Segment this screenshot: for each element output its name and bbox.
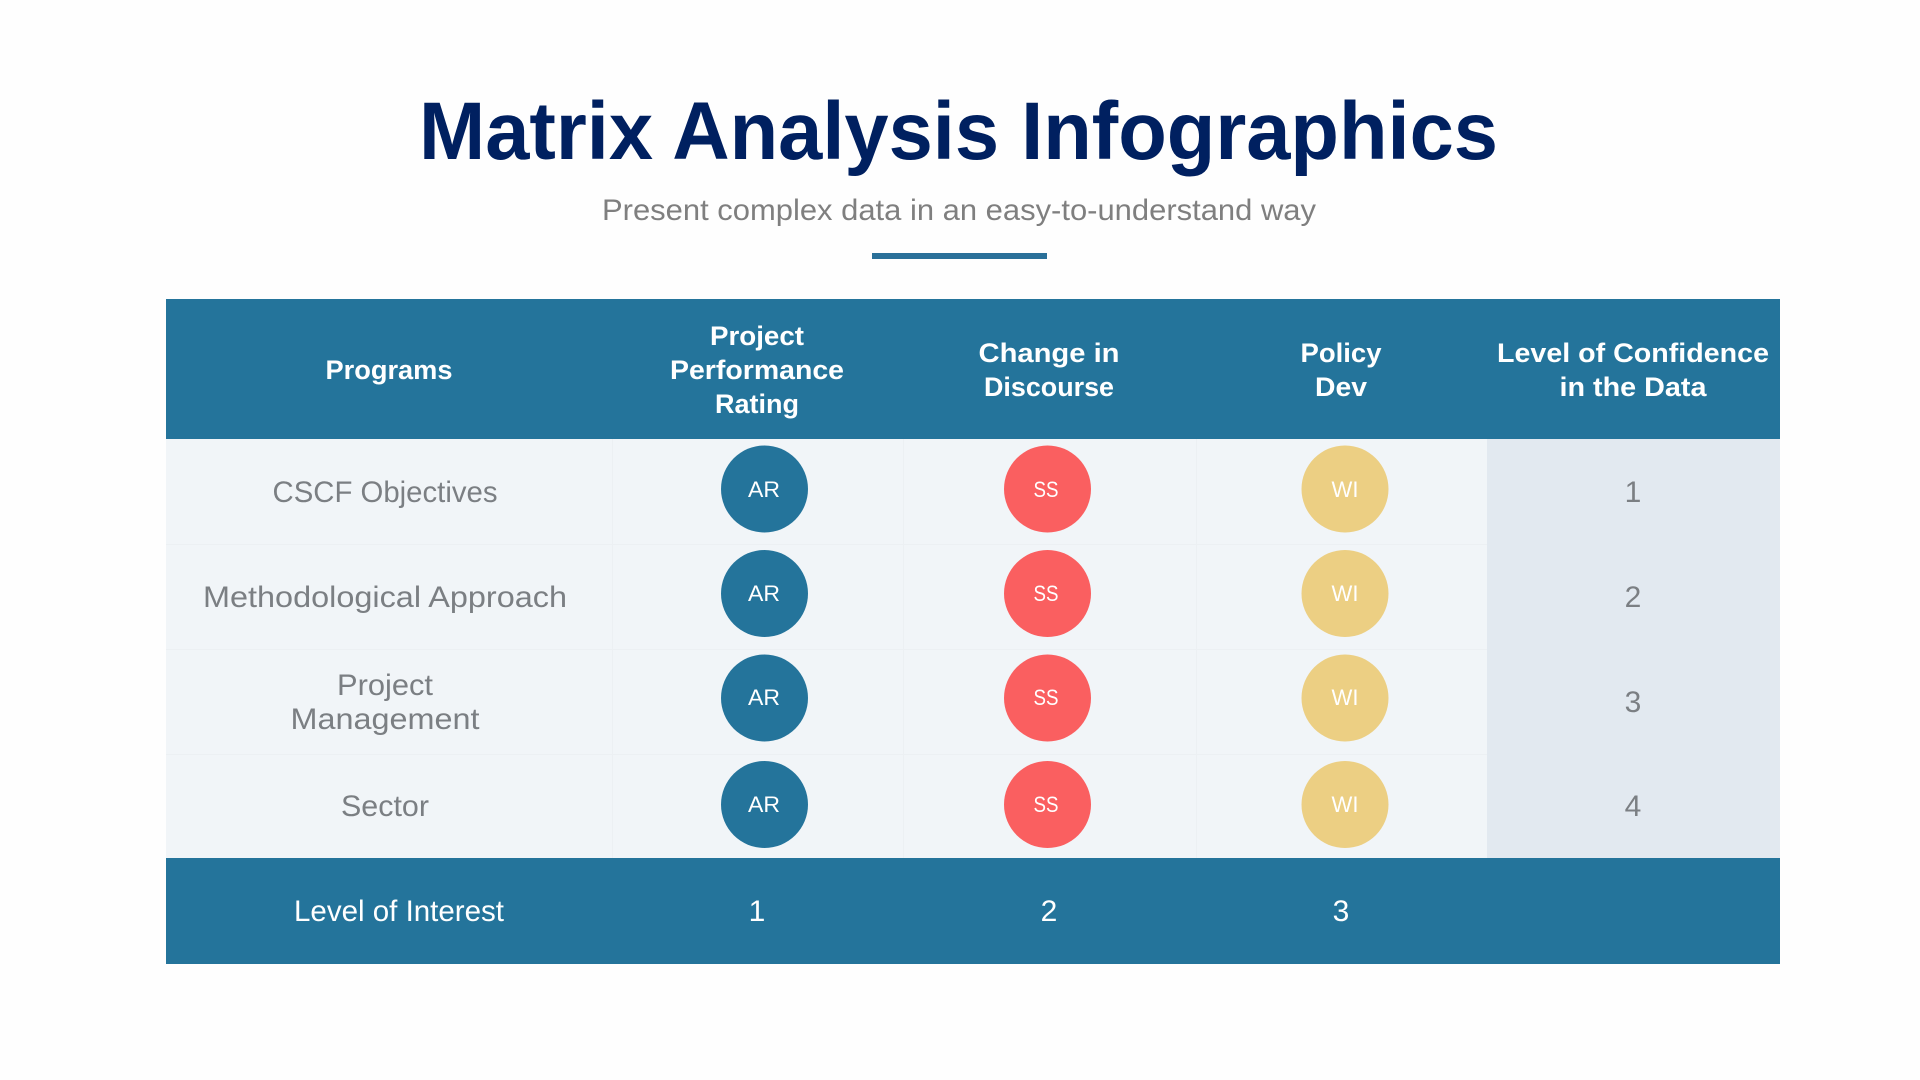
panel: table body background [166, 439, 1487, 858]
row: Project Management: WI [1332, 685, 1358, 710]
panel: footer Level of Interest: 3 [1333, 895, 1349, 928]
title underline accent [872, 253, 1047, 259]
row: CSCF Objectives: WI [1332, 477, 1358, 502]
heading: Level of Confidence in the Data: in the Data [1560, 372, 1708, 402]
row: Project Management: 3 [1625, 686, 1641, 719]
row: Methodological Approach [203, 550, 1641, 637]
title: Matrix Analysis Infographics [419, 86, 1498, 177]
panel: footer Level of Interest: 1 [749, 895, 765, 928]
row: Sector: 4 [1625, 790, 1641, 823]
panel: confidence column background [1487, 439, 1780, 858]
row: CSCF Objectives: 1 [1625, 476, 1641, 509]
heading: Policy Dev [1300, 338, 1382, 402]
row: Methodological Approach: AR [748, 581, 780, 606]
heading: Level of Confidence in the Data: Level of Confidence [1497, 338, 1769, 368]
heading: Project Performance Rating [670, 321, 844, 419]
row: Methodological Approach: Methodological Approach [203, 581, 567, 614]
heading: Level of Confidence in the Data [1497, 338, 1769, 402]
row: Project Management: AR [748, 685, 780, 710]
panel: footer Level of Interest: Level of Interest [294, 895, 505, 928]
heading: Change in Discourse: Change in [978, 338, 1120, 368]
row: Project Management: Project [337, 669, 434, 702]
heading: Programs: Programs [326, 355, 452, 385]
matrix table [166, 299, 1780, 964]
row: Sector: SS [1034, 792, 1058, 817]
row: Project Management [290, 654, 1641, 742]
panel: footer Level of Interest [166, 858, 1780, 964]
row: CSCF Objectives [272, 446, 1641, 532]
row: Project Management: Management [290, 703, 480, 736]
heading: Project Performance Rating: Performance [670, 355, 844, 385]
row: Sector: Sector [341, 790, 429, 823]
panel: footer Level of Interest: 2 [1041, 895, 1057, 928]
heading: Project Performance Rating: Rating [715, 389, 799, 419]
heading: Project Performance Rating: Project [710, 321, 804, 351]
heading: Policy Dev: Policy [1300, 338, 1382, 368]
row: Sector: AR [748, 792, 780, 817]
row: Methodological Approach: 2 [1625, 581, 1641, 614]
row: CSCF Objectives: AR [748, 477, 780, 502]
row: Sector [341, 761, 1641, 848]
panel: table header [166, 299, 1780, 439]
subtitle: Present complex data in an easy-to-understand way [602, 194, 1316, 227]
row: CSCF Objectives: SS [1034, 477, 1058, 502]
row: Project Management: SS [1034, 685, 1058, 710]
row: Methodological Approach: WI [1332, 581, 1358, 606]
heading: Change in Discourse [978, 338, 1120, 402]
row: Sector: WI [1332, 792, 1358, 817]
heading: Change in Discourse: Discourse [984, 372, 1114, 402]
row: CSCF Objectives: CSCF Objectives [272, 476, 498, 509]
heading: Policy Dev: Dev [1315, 372, 1367, 402]
row: Methodological Approach: SS [1034, 581, 1058, 606]
